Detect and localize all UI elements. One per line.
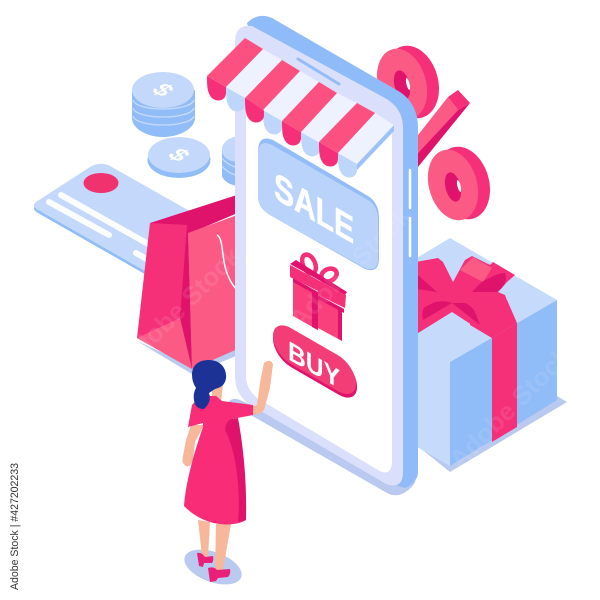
hair [192,360,226,409]
buy text: BUY [288,336,340,395]
speaker [298,59,339,84]
sale text: SALE [274,164,354,252]
icon: single coin: $ [161,145,197,166]
watermark [113,200,577,474]
woman figure [180,360,273,591]
icon: coin stack behind phone [222,136,240,186]
phone base shadow [228,399,416,495]
stock id text: Adobe Stock | #427202233 [9,463,21,590]
shoes [197,553,230,582]
buy button [273,318,357,405]
sale panel [258,138,379,270]
gift bow [299,252,339,284]
phone back edge [247,16,418,488]
awning [207,38,394,177]
icon: percent sign [369,39,498,226]
side buttons [409,170,411,256]
icon: credit card [34,164,195,283]
watermark: Adobe Stock [283,200,417,334]
shopping bag [137,194,240,374]
icon: coin stack: $ [145,80,181,101]
icon: single coin [148,137,210,178]
neck [212,385,223,402]
raised arm [252,361,273,415]
phone front frame [235,26,403,486]
phone screen [246,95,392,472]
bow [410,256,515,336]
floor shadow [180,543,246,591]
lowered arm [182,425,204,466]
gift box with bow [410,238,567,472]
icon: gift on screen [290,252,347,341]
dress [184,396,253,524]
icon: coin stack [132,72,195,137]
legs [198,520,231,570]
watermark: Adobe Stock [113,240,247,374]
bag handle [217,235,236,289]
dress shade [225,418,246,522]
watermark: Adobe Stock [443,340,577,474]
phone [235,16,418,488]
